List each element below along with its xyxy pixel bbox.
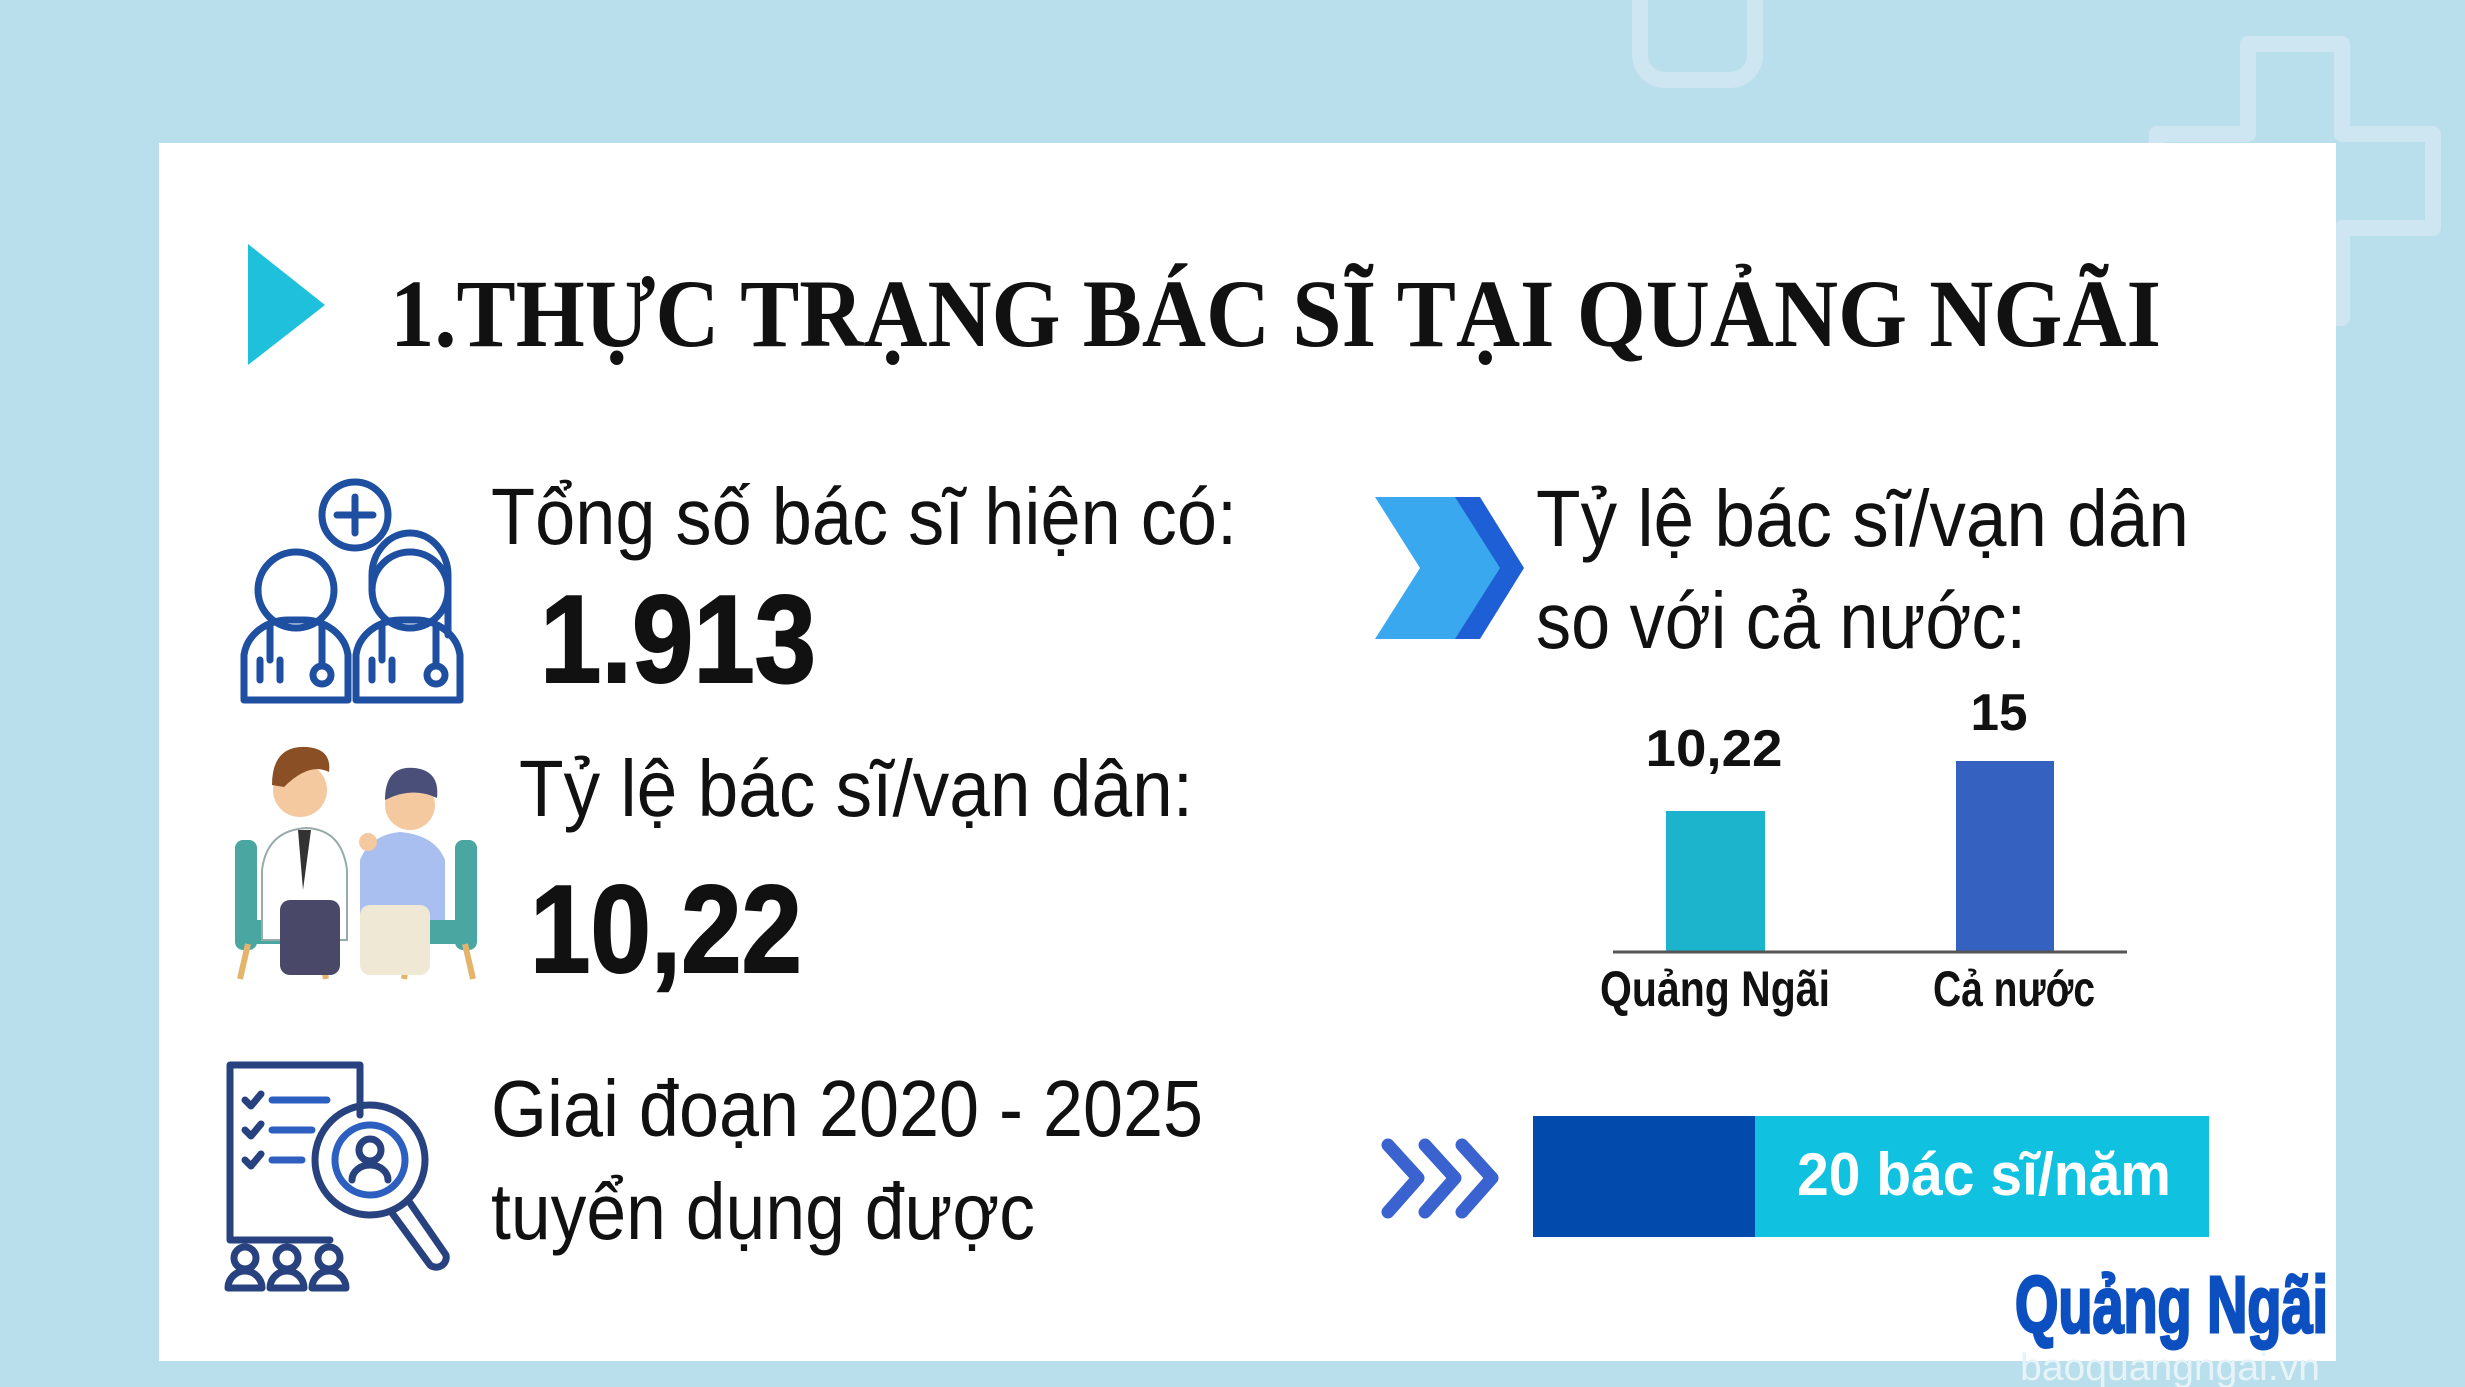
icon: triple chevrons (1388, 1145, 1492, 1212)
text: comparison heading: Tỷ lệ bác sĩ/vạn dân (1536, 474, 2189, 563)
text: comparison heading (1536, 474, 2189, 665)
logo: Quảng Ngãi: Quảng Ngãi (2015, 1260, 2328, 1349)
icon: blue chevron (1375, 497, 1524, 639)
bar chart (1600, 684, 2127, 1017)
bar: Cả nước (1956, 761, 2054, 952)
text: total doctors label: Tổng số bác sĩ hiện có: (491, 472, 1237, 561)
text: comparison heading: so với cả nước: (1536, 576, 2026, 665)
text: recruitment period (491, 1064, 1203, 1256)
title: 1.THỰC TRẠNG BÁC SĨ TẠI QUẢNG NGÃI (390, 260, 2161, 367)
text: ratio label: Tỷ lệ bác sĩ/vạn dân: (519, 744, 1193, 833)
bar: Quảng Ngãi (1666, 811, 1765, 952)
decorative: faint plus outline (1640, 0, 2433, 318)
text: recruitment period: tuyển dụng được (491, 1167, 1035, 1256)
bar chart: 15 (1970, 684, 2028, 742)
panel: white card (159, 143, 2336, 1361)
number: 10,22: 10,22 (530, 861, 802, 999)
icon: doctor and patient illustration (235, 747, 477, 979)
icon: title triangle (248, 244, 325, 365)
bar chart: 10,22 (1646, 720, 1782, 778)
logo: Quảng Ngãi (2015, 1260, 2328, 1387)
number: 1.913: 1.913 (540, 571, 816, 709)
icon: recruitment (228, 1065, 446, 1288)
icon: doctors outline (244, 482, 460, 700)
callout: 20 doctors per year: 20 bác sĩ/năm (1797, 1141, 2171, 1208)
callout: 20 doctors per year (1533, 1116, 2209, 1237)
text: recruitment period: Giai đoạn 2020 - 2025 (491, 1064, 1203, 1153)
bar chart: Cả nước (1933, 961, 2095, 1017)
bar chart: Quảng Ngãi (1600, 961, 1830, 1017)
